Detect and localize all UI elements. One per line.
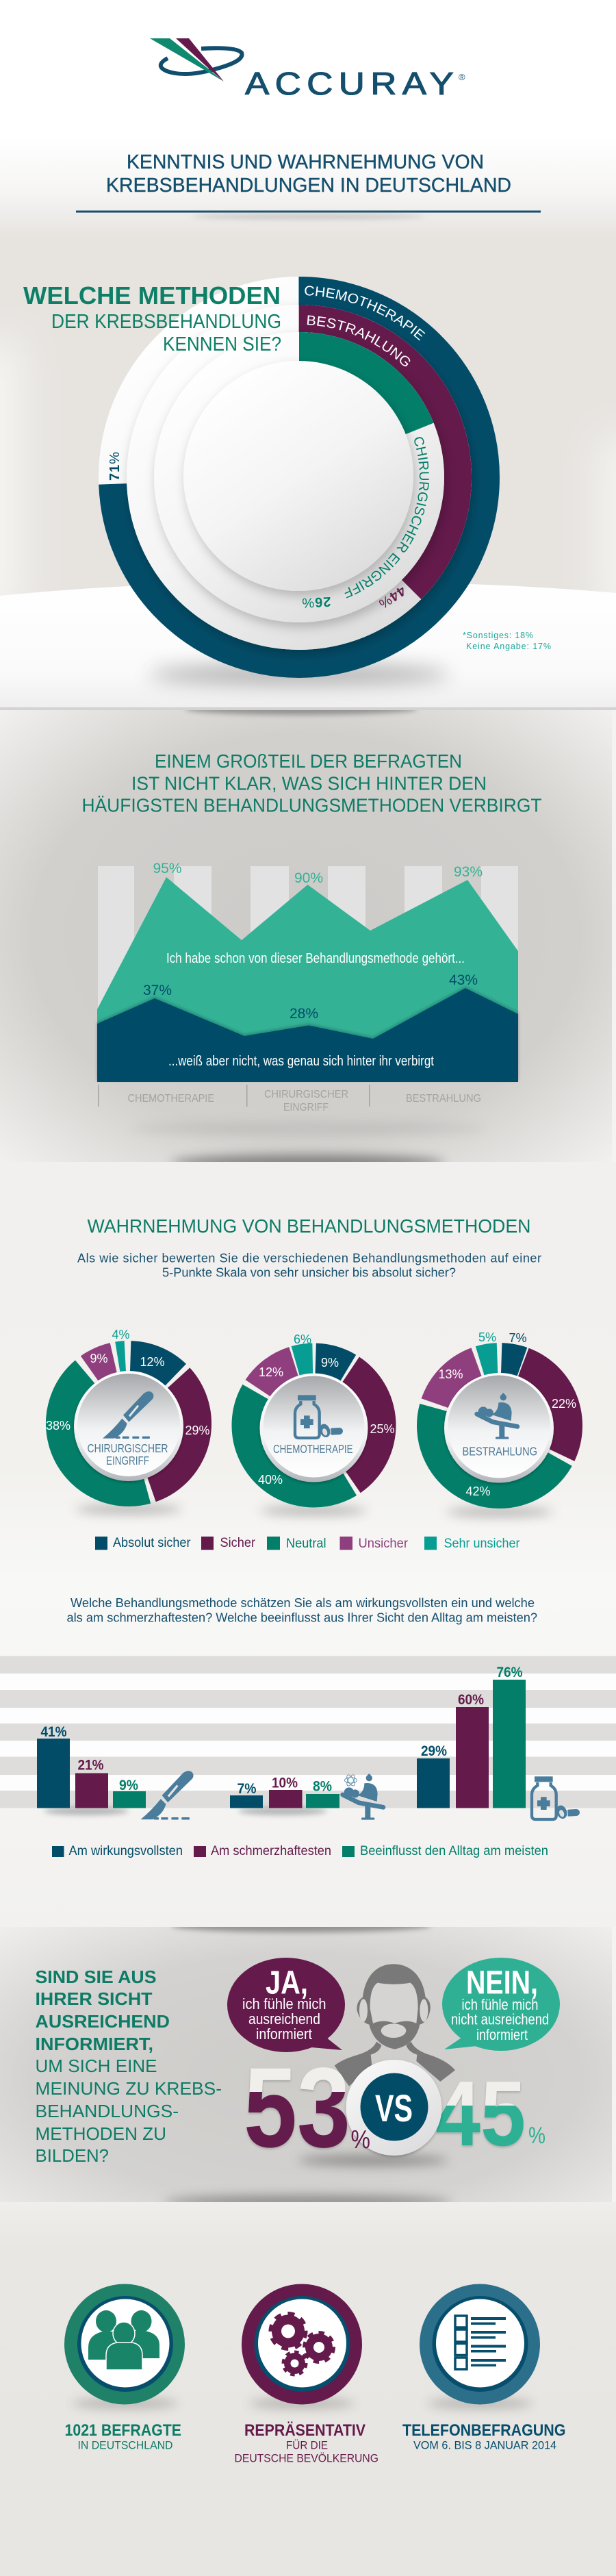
- bars: chemotherapy: [417, 1665, 526, 1808]
- VS badge: VS: [375, 2086, 413, 2130]
- section heading: WAHRNEHMUNG VON BEHANDLUNGSMETHODEN: [88, 1215, 531, 1237]
- panel: sufficiently informed: [0, 1919, 616, 2209]
- bars: chemotherapy: 60%: [458, 1692, 484, 1708]
- caption: Telefonbefragung: [402, 2421, 565, 2451]
- number 53: 53: [244, 2045, 350, 2171]
- speech bubble: Ja: ich fühle mich: [242, 1995, 326, 2012]
- area chart: [97, 861, 518, 1082]
- legend: safety scale: Unsicher: [359, 1537, 409, 1551]
- section heading: [82, 750, 542, 816]
- percent sign 53: %: [350, 2125, 370, 2154]
- axis categories: [98, 1085, 481, 1113]
- area caption top: Ich habe schon von dieser Behandlungsmethode gehört...: [166, 951, 465, 966]
- legend: safety scale: [95, 1536, 520, 1551]
- speech bubble: Ja: JA,: [266, 1965, 308, 2001]
- donut centre label: EINGRIFF: [106, 1454, 149, 1467]
- donut values: 38%: [46, 1419, 70, 1432]
- speech bubble: Nein: [442, 1958, 560, 2051]
- footnote: Keine Angabe: 17%: [466, 642, 551, 651]
- legend: bar chart: Am wirkungsvollsten: [68, 1844, 183, 1858]
- badge: respondents: [64, 2284, 185, 2405]
- donut values: [438, 1330, 576, 1498]
- footnote: [463, 631, 551, 651]
- donut values: 42%: [465, 1485, 491, 1498]
- title: [76, 151, 541, 219]
- bars: chemotherapy: 76%: [497, 1665, 523, 1680]
- value 26%: 26%: [301, 594, 331, 610]
- lower value labels: 37%: [143, 983, 172, 998]
- footnote: *Sonstiges: 18%: [463, 631, 533, 640]
- icon: medicine bottle: [295, 1395, 339, 1439]
- shadow under VS: [298, 2155, 448, 2166]
- icon: checklist: [455, 2316, 506, 2369]
- icon: scalpel: [141, 1771, 194, 1819]
- area: do not know what it means: [97, 988, 518, 1082]
- panel: methodology: [0, 2202, 616, 2576]
- section heading: HÄUFIGSTEN BEHANDLUNGSMETHODEN VERBIRGT: [82, 794, 542, 816]
- question text: MEINUNG ZU KREBS-: [36, 2078, 222, 2099]
- bars: radiation: 7%: [237, 1781, 257, 1797]
- legend: safety scale: Sicher: [220, 1536, 256, 1550]
- donut values: 13%: [438, 1367, 463, 1381]
- area: have heard of method: [97, 877, 518, 1082]
- speech bubble: Ja: informiert: [256, 2025, 312, 2043]
- donut values: 40%: [258, 1473, 283, 1487]
- donut values: 5%: [478, 1330, 496, 1344]
- icon: bearded man: [335, 1964, 455, 2086]
- effectiveness question: [67, 1596, 537, 1624]
- question text: AUSREICHEND: [36, 2011, 170, 2032]
- icon: medicine bottle: [532, 1776, 576, 1820]
- donut: surgery: [33, 1328, 224, 1519]
- icon: radiation patient with atom: [343, 1773, 383, 1820]
- logo: [150, 38, 465, 101]
- caption: Repräsentativ: REPRÄSENTATIV: [244, 2421, 365, 2440]
- donut: radiation: [407, 1330, 592, 1518]
- value 44%: 44%: [376, 583, 409, 611]
- question heading: KENNEN SIE?: [163, 333, 281, 355]
- radial bar chart: known methods: [99, 277, 500, 678]
- question text: [36, 1967, 222, 2166]
- lower value labels: [143, 972, 478, 1022]
- speech bubble: Nein: NEIN,: [466, 1965, 538, 2001]
- question text: INFORMIERT,: [36, 2034, 153, 2054]
- logo: ®: [459, 72, 465, 82]
- donut values: [46, 1328, 210, 1437]
- donut values: 4%: [112, 1328, 130, 1341]
- bars: surgery: 41%: [41, 1724, 67, 1740]
- legend: safety scale: Neutral: [286, 1537, 326, 1551]
- VS badge: [346, 2060, 442, 2156]
- question heading: WELCHE METHODEN: [23, 281, 281, 310]
- bar chart: [0, 1656, 616, 1820]
- icon: radiation patient: [477, 1393, 517, 1439]
- upper value labels: 90%: [294, 870, 323, 886]
- donut values: 9%: [90, 1352, 108, 1365]
- upper value labels: 93%: [454, 864, 483, 880]
- donut values: 12%: [259, 1365, 283, 1379]
- panel: header and awareness section: [0, 0, 616, 710]
- effectiveness question: Welche Behandlungsmethode schätzen Sie als am wirkungsvollsten ein und welche: [70, 1596, 535, 1610]
- caption: Telefonbefragung: VOM 6. BIS 8 JANUAR 2014: [413, 2439, 556, 2451]
- question heading: DER KREBSBEHANDLUNG: [51, 311, 281, 333]
- percent sign 45: %: [528, 2123, 546, 2149]
- icon: gears: [271, 2314, 333, 2375]
- donut values: 12%: [140, 1355, 165, 1369]
- logo: ACCURAY: [245, 66, 454, 101]
- arc label: Chemotherapie: CHEMOTHERAPIE: [305, 286, 426, 341]
- caption: 1021 Befragte: 1021 BEFRAGTE: [64, 2421, 181, 2440]
- question text: BILDEN?: [36, 2145, 109, 2166]
- safety question: [77, 1252, 541, 1279]
- speech bubble: Ja: [227, 1958, 345, 2052]
- donut values: 22%: [552, 1397, 576, 1411]
- panel: heard of but unknown: [0, 703, 616, 1171]
- shadow under ring chart: [149, 664, 450, 685]
- donut values: 6%: [294, 1333, 311, 1346]
- caption: 1021 Befragte: IN DEUTSCHLAND: [78, 2439, 172, 2451]
- donut values: [258, 1333, 395, 1487]
- effectiveness question: als am schmerzhaftesten? Welche beeinflusst aus Ihrer Sicht den Alltag am meisten?: [67, 1611, 537, 1624]
- speech bubble: Nein: ich fühle mich: [461, 1996, 538, 2013]
- donut centre label: CHEMOTHERAPIE: [273, 1442, 353, 1456]
- arc label: Bestrahlung: BESTRAHLUNG: [307, 315, 411, 367]
- upper value labels: 95%: [153, 861, 182, 876]
- lower value labels: 28%: [290, 1006, 318, 1022]
- badge shadows: [72, 2399, 533, 2408]
- safety question: 5-Punkte Skala von sehr unsicher bis absolut sicher?: [162, 1265, 456, 1279]
- question text: IHRER SICHT: [36, 1988, 153, 2009]
- caption: Repräsentativ: DEUTSCHE BEVÖLKERUNG: [234, 2451, 378, 2465]
- bars: radiation: 8%: [313, 1779, 332, 1794]
- axis categories: EINGRIFF: [283, 1102, 329, 1113]
- speech bubble: Ja: ausreichend: [248, 2010, 320, 2028]
- bars: radiation: [230, 1775, 339, 1808]
- axis categories: CHIRURGISCHER: [264, 1089, 348, 1100]
- title: KREBSBEHANDLUNGEN IN DEUTSCHLAND: [106, 175, 511, 197]
- icon: scalpel: [103, 1391, 153, 1439]
- legend: safety scale: Sehr unsicher: [444, 1537, 520, 1551]
- donut centre label: CHIRURGISCHER: [88, 1441, 168, 1455]
- question text: BEHANDLUNGS-: [36, 2101, 179, 2121]
- axis categories: CHEMOTHERAPIE: [127, 1093, 214, 1104]
- question text: METHODEN ZU: [36, 2123, 166, 2144]
- number 45: 45: [435, 2062, 526, 2165]
- bars: surgery: 9%: [119, 1778, 138, 1793]
- area caption bottom: ...weiß aber nicht, was genau sich hinter ihr verbirgt: [168, 1054, 434, 1069]
- legend: bar chart: Am schmerzhaftesten: [211, 1844, 331, 1858]
- legend: bar chart: [52, 1844, 548, 1858]
- donut values: 7%: [509, 1331, 527, 1345]
- section heading: EINEM GROßTEIL DER BEFRAGTEN: [155, 750, 462, 772]
- bars: surgery: [37, 1724, 146, 1808]
- caption: Repräsentativ: [234, 2421, 378, 2465]
- question heading: [23, 281, 281, 355]
- section heading: IST NICHT KLAR, WAS SICH HINTER DEN: [131, 772, 487, 794]
- axis categories: BESTRAHLUNG: [406, 1093, 481, 1104]
- question text: UM SICH EINE: [36, 2056, 157, 2076]
- caption: Repräsentativ: FÜR DIE: [286, 2439, 328, 2451]
- bars: radiation: 10%: [272, 1775, 298, 1791]
- lower value labels: 43%: [449, 972, 478, 988]
- badge: representative: [242, 2284, 362, 2405]
- donut values: 9%: [321, 1356, 339, 1369]
- question text: SIND SIE AUS: [36, 1967, 156, 1987]
- donut centre label: BESTRAHLUNG: [463, 1445, 537, 1459]
- speech bubble: Nein: informiert: [476, 2026, 528, 2043]
- legend: bar chart: Beeinflusst den Alltag am meisten: [360, 1844, 548, 1858]
- donut values: 29%: [185, 1424, 210, 1437]
- upper value labels: [153, 861, 483, 886]
- arc label: Chirurgischer Eingriff: CHIRURGISCHER EINGRIFF: [345, 437, 429, 598]
- bars: surgery: 21%: [78, 1757, 104, 1773]
- bars: chemotherapy: 29%: [421, 1743, 447, 1759]
- donut centre label: [88, 1441, 168, 1467]
- donut: chemotherapy: [220, 1332, 407, 1519]
- panel: perception of treatments: [0, 1162, 616, 1927]
- title: KENNTNIS UND WAHRNEHMUNG VON: [127, 151, 484, 173]
- donut shadows: [75, 1504, 553, 1517]
- caption: Telefonbefragung: TELEFONBEFRAGUNG: [402, 2421, 565, 2440]
- caption: 1021 Befragte: [64, 2421, 181, 2451]
- safety question: Als wie sicher bewerten Sie die verschiedenen Behandlungsmethoden auf einer: [77, 1252, 541, 1265]
- value 71%: 71%: [107, 451, 123, 481]
- speech bubble: Nein: nicht ausreichend: [451, 2010, 549, 2028]
- badge: telephone survey: [420, 2284, 540, 2405]
- legend: safety scale: Absolut sicher: [113, 1536, 191, 1550]
- icon: people: [88, 2310, 159, 2370]
- donut values: 25%: [370, 1422, 395, 1436]
